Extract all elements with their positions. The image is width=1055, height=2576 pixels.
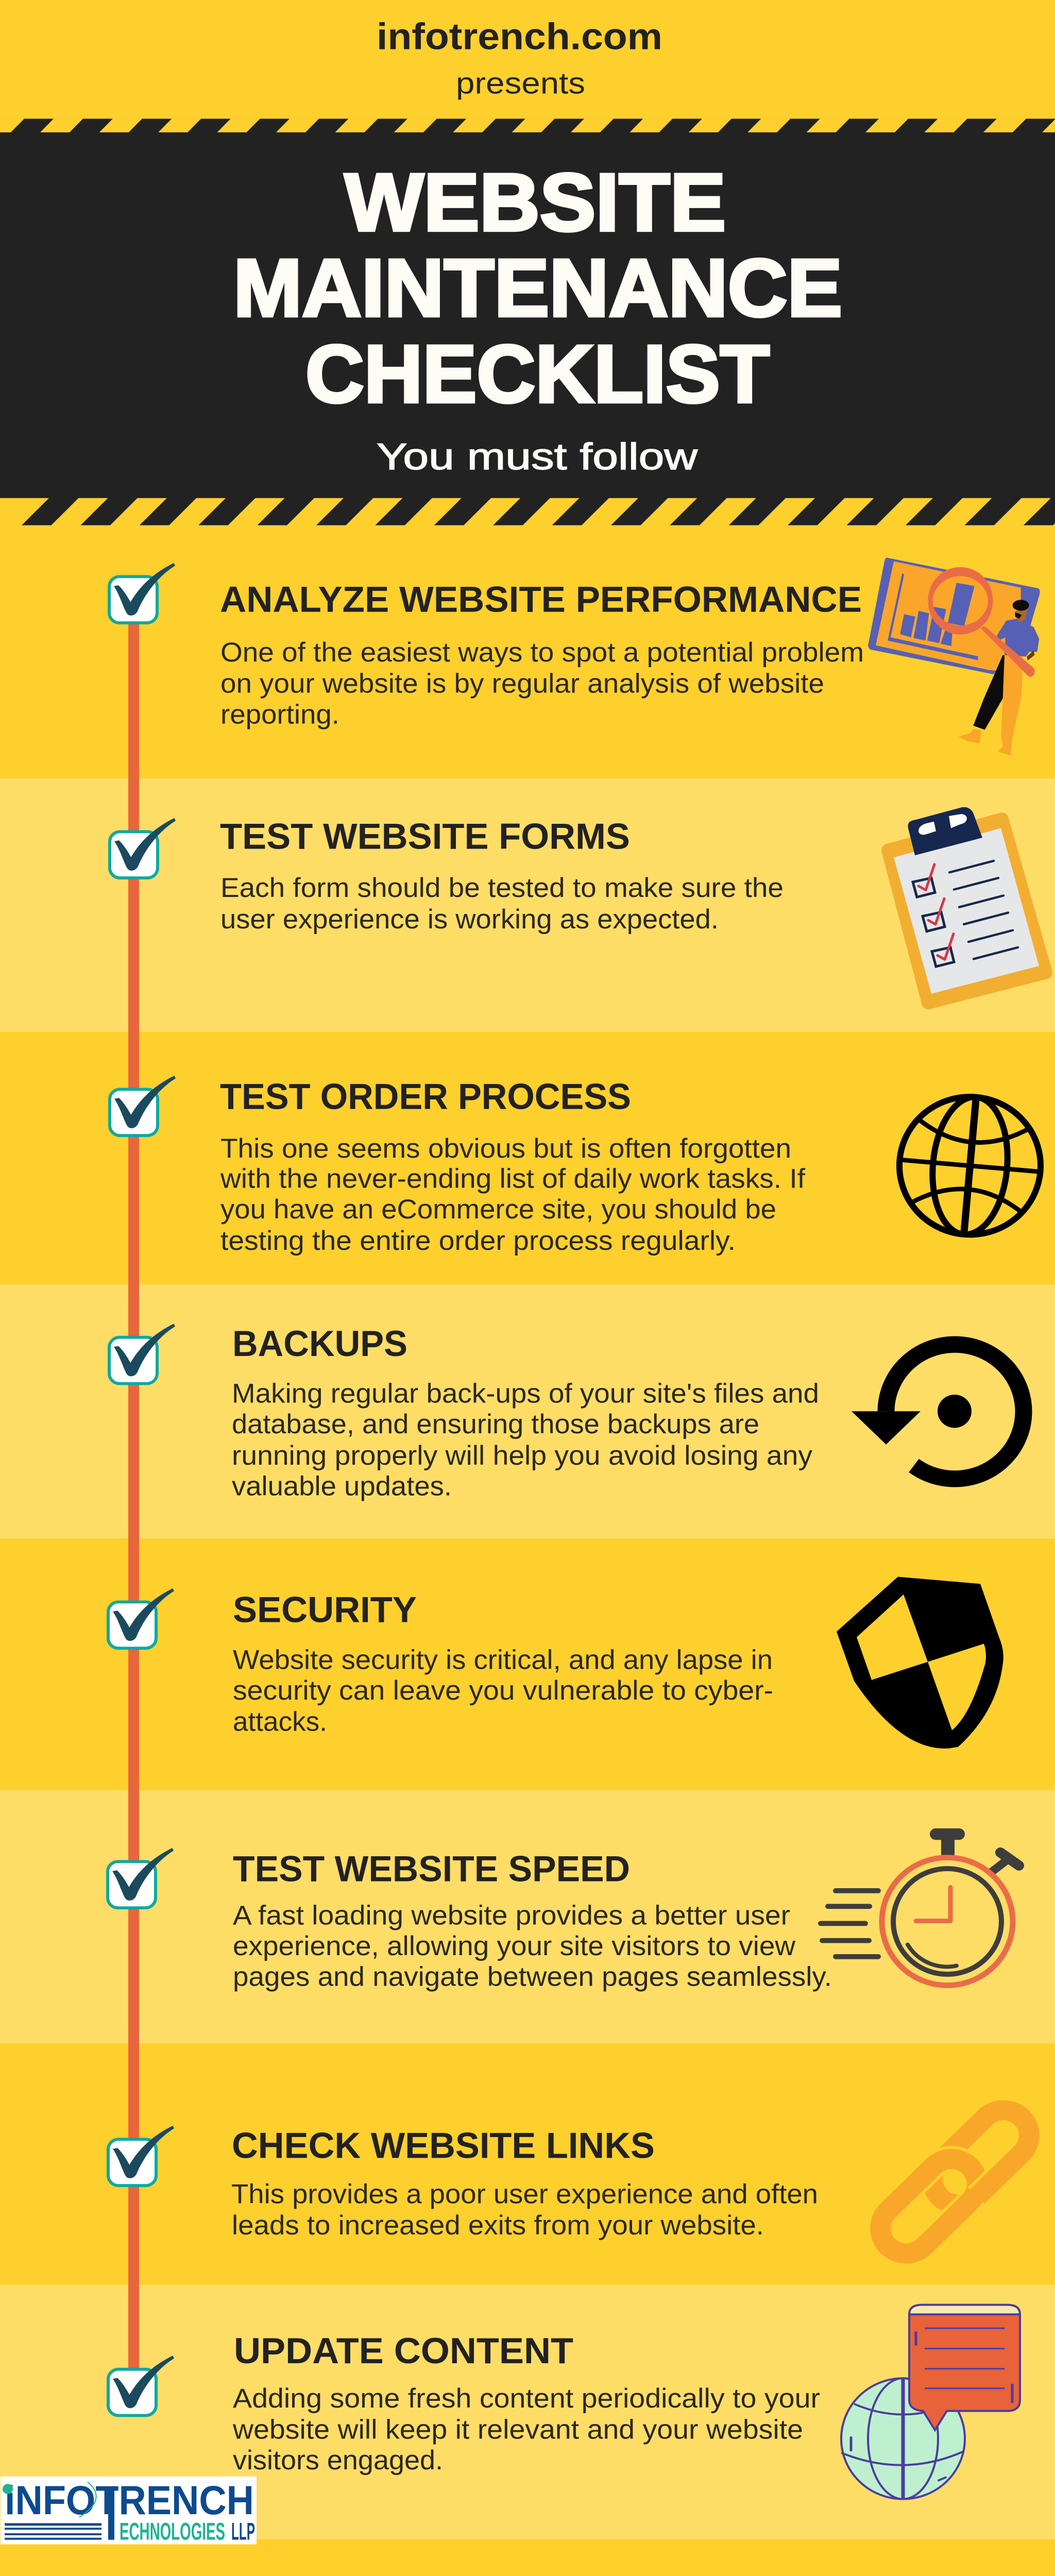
title banner: [0, 118, 1055, 526]
heading: TEST WEBSITE SPEED: [233, 1849, 630, 1889]
body text: This provides a poor user experience and often: [231, 2179, 818, 2209]
logo suffix: LLP: [231, 2518, 255, 2546]
heading: ANALYZE WEBSITE PERFORMANCE: [220, 580, 862, 620]
body text: [232, 2383, 820, 2476]
panel: test website speed: [0, 1790, 1055, 2043]
body text: reporting.: [220, 700, 339, 730]
body text: security can leave you vulnerable to cyber-: [233, 1675, 773, 1706]
logo tagline: ECHNOLOGIES: [120, 2518, 225, 2546]
checkbox 3: [110, 1076, 176, 1136]
body text: Adding some fresh content periodically to your: [233, 2383, 820, 2414]
panel: test order process: [0, 1032, 1055, 1284]
body text: running properly will help you avoid losing any: [232, 1440, 812, 1471]
presents label: presents: [456, 66, 585, 100]
checkbox 8: [108, 2355, 174, 2415]
title: MAINTENANCE: [233, 242, 842, 333]
heading: UPDATE CONTENT: [234, 2331, 573, 2371]
bottom band: [0, 2539, 1055, 2576]
body text: One of the easiest ways to spot a potential problem: [220, 638, 864, 668]
body text: Website security is critical, and any lapse in: [233, 1645, 773, 1675]
checkbox 1: [109, 563, 175, 623]
body text: you have an eCommerce site, you should be: [220, 1195, 776, 1225]
icon: globe with speech bubble: [841, 2305, 1020, 2499]
checkbox 2: [110, 818, 176, 878]
icon: man with magnifier and chart: [868, 558, 1040, 755]
body text: user experience is working as expected.: [220, 904, 719, 935]
body text: [220, 873, 784, 935]
heading: TEST WEBSITE FORMS: [220, 817, 630, 857]
checkbox 5: [108, 1588, 174, 1648]
body text: [220, 1134, 805, 1256]
body text: valuable updates.: [232, 1471, 452, 1501]
title: WEBSITE: [345, 157, 726, 248]
heading: SECURITY: [233, 1590, 417, 1630]
body text: [233, 1901, 832, 1992]
body text: testing the entire order process regularly.: [220, 1226, 736, 1256]
panel: test website forms: [0, 778, 1055, 1032]
panel: backups: [0, 1284, 1055, 1538]
heading: TEST ORDER PROCESS: [220, 1077, 631, 1117]
title: [233, 157, 842, 419]
heading: BACKUPS: [232, 1324, 407, 1364]
icon: shield: [837, 1577, 1003, 1749]
panel: update content: [0, 2285, 1055, 2539]
body text: A fast loading website provides a better user: [233, 1901, 790, 1930]
panel: check website links: [0, 2043, 1055, 2285]
icon: backup arrow: [852, 1345, 1024, 1479]
checkbox 4: [109, 1324, 175, 1384]
icon: globe: [894, 1091, 1046, 1241]
body text: attacks.: [233, 1707, 327, 1737]
body text: Making regular back-ups of your site's files and: [232, 1379, 819, 1409]
subtitle: You must follow: [377, 436, 697, 478]
body text: with the never-ending list of daily work tasks. If: [220, 1164, 805, 1194]
heading: CHECK WEBSITE LINKS: [232, 2126, 655, 2166]
body text: visitors engaged.: [233, 2446, 443, 2476]
site name: infotrench.com: [377, 16, 662, 58]
logo wordmark: iNFOTRENCH: [5, 2478, 254, 2523]
body text: [232, 1379, 819, 1501]
body text: experience, allowing your site visitors to view: [233, 1931, 795, 1961]
panel: security: [0, 1538, 1055, 1790]
body text: [220, 638, 864, 730]
logo: infotrench technologies: [1, 2477, 257, 2546]
checkbox 7: [108, 2126, 174, 2185]
body text: leads to increased exits from your website.: [232, 2210, 764, 2241]
body text: [233, 1645, 773, 1737]
body text: [231, 2179, 818, 2241]
body text: website will keep it relevant and your website: [232, 2415, 803, 2445]
timeline with checkboxes: [108, 563, 176, 2415]
timeline line: [128, 604, 139, 2395]
title: CHECKLIST: [305, 328, 770, 419]
panel: analyze website performance: [0, 526, 1055, 778]
body text: Each form should be tested to make sure the: [220, 873, 784, 903]
icon: stopwatch: [821, 1828, 1019, 1986]
header: presenter: [377, 16, 662, 100]
body text: pages and navigate between pages seamlessly.: [233, 1962, 832, 1992]
checkbox 6: [108, 1848, 174, 1908]
icon: chain link: [870, 2100, 1040, 2264]
body text: This one seems obvious but is often forgotten: [220, 1134, 791, 1164]
body text: database, and ensuring those backups are: [232, 1410, 759, 1439]
body text: on your website is by regular analysis of website: [220, 669, 824, 699]
icon: clipboard checklist: [888, 807, 1046, 1003]
